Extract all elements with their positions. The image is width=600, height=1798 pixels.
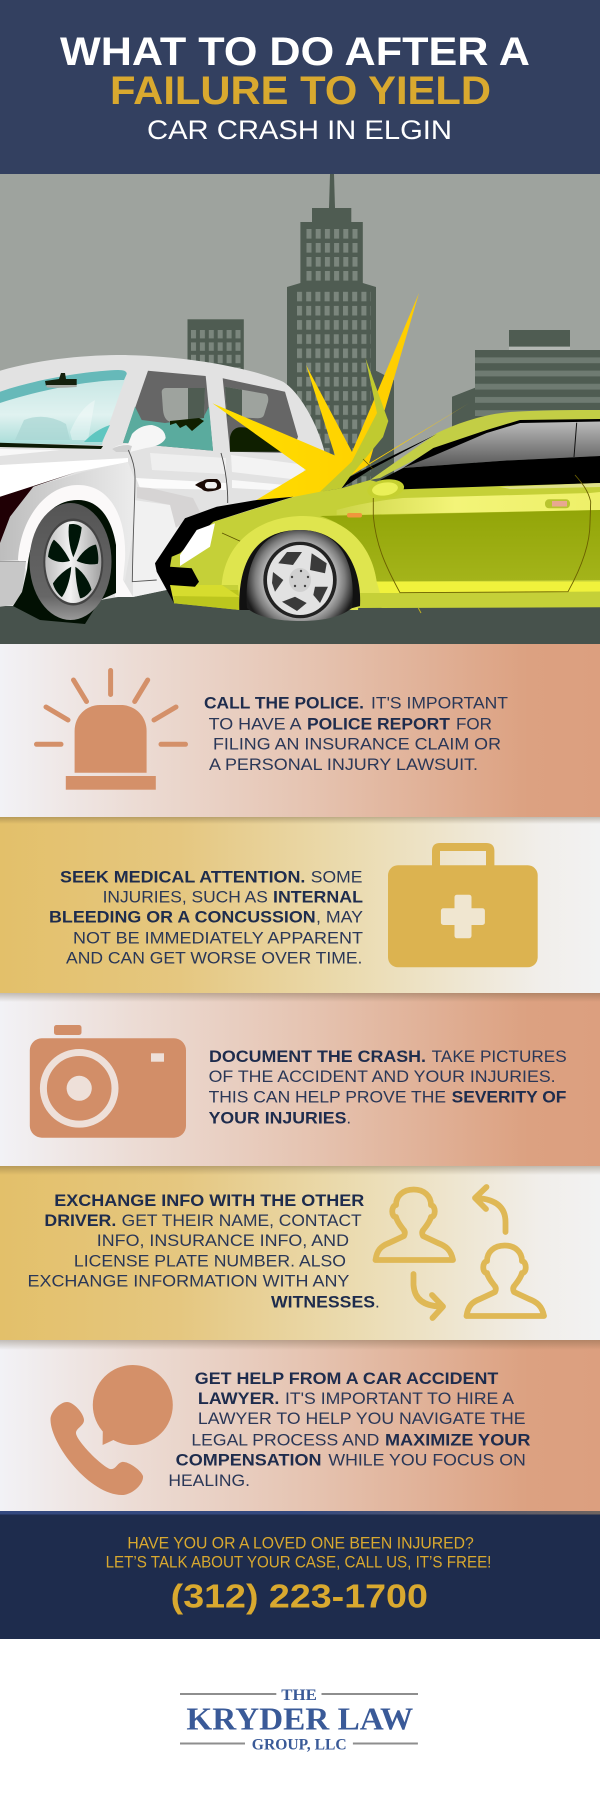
text: get legal help: LAWYER. [198, 1389, 279, 1408]
icon: first aid kit [388, 843, 538, 967]
icon: two people exchanging [376, 1187, 544, 1318]
car crash scene [0, 174, 600, 644]
text: document the crash: YOUR INJURIES [209, 1108, 346, 1127]
text: seek medical attention: AND CAN GET WORSE OVER TIME. [66, 948, 362, 967]
arrow down [414, 1274, 443, 1318]
call to action text: HAVE YOU OR A LOVED ONE BEEN INJURED? [127, 1534, 474, 1552]
text: seek medical attention: INJURIES, SUCH AS [103, 888, 268, 907]
icon: siren [36, 670, 186, 790]
text: get legal help: WHILE YOU FOCUS ON [328, 1450, 526, 1469]
door handle [545, 499, 570, 508]
panel: get legal help [0, 1340, 600, 1512]
text: call the police: TO HAVE A [209, 714, 302, 733]
bright shoulder strip [337, 492, 600, 515]
white headlight [180, 523, 215, 566]
hood highlight [0, 458, 128, 497]
lower sill [370, 582, 600, 593]
text: get legal help: HEALING. [168, 1471, 250, 1490]
text: seek medical attention: SOME [311, 867, 362, 886]
text: document the crash: DOCUMENT THE CRASH. [209, 1047, 426, 1066]
rear side window [223, 378, 298, 453]
text: get legal help: LEGAL PROCESS AND [191, 1430, 379, 1449]
white car [0, 355, 330, 624]
text: document the crash: . [346, 1108, 351, 1127]
door mirror [112, 425, 166, 452]
text: seek medical attention: NOT BE IMMEDIATELY APPARENT [73, 928, 363, 947]
text: get legal help: LAWYER TO HELP YOU NAVIGATE THE [198, 1409, 526, 1428]
text: document the crash: THIS CAN HELP PROVE THE [209, 1088, 446, 1107]
text: call the police: CALL THE POLICE. [204, 693, 364, 712]
front side window [123, 371, 213, 451]
rear view mirror [45, 373, 77, 386]
text: call the police: A PERSONAL INJURY LAWSUIT. [209, 755, 478, 774]
text: document the crash [209, 1047, 567, 1127]
logo [0, 1639, 600, 1798]
text: exchange info: EXCHANGE INFORMATION WITH ANY [28, 1272, 349, 1291]
text: get legal help: IT'S IMPORTANT TO HIRE A [285, 1389, 515, 1408]
text: call the police: POLICE REPORT [307, 714, 451, 733]
black bumper [155, 497, 293, 603]
title line 3: CAR CRASH IN ELGIN [147, 115, 452, 145]
text: call the police: FOR [456, 714, 492, 733]
windshield [0, 370, 127, 445]
text: exchange info: . [375, 1293, 380, 1312]
side marker [347, 513, 362, 518]
panel: call the police [0, 644, 600, 817]
text: exchange info: GET THEIR NAME, CONTACT [122, 1211, 362, 1230]
headlight [0, 472, 76, 543]
lower window black [380, 456, 600, 489]
text: exchange info: INFO, INSURANCE INFO, AND [97, 1231, 349, 1250]
window [403, 421, 600, 468]
phone number: (312) 223-1700 [171, 1577, 428, 1614]
wheel arch ring [18, 485, 133, 597]
door highlights [150, 453, 226, 474]
door lines and handle [128, 450, 157, 582]
text: get legal help: COMPENSATION [176, 1450, 322, 1469]
call to action text line 2: LET’S TALK ABOUT YOUR CASE, CALL US, IT’S FREE! [106, 1553, 491, 1571]
person one [376, 1190, 453, 1260]
title line 2: FAILURE TO YIELD [110, 69, 491, 113]
icon: phone and speech bubble [50, 1365, 173, 1495]
arrow up [475, 1187, 506, 1232]
impact starburst [212, 293, 469, 500]
panel: seek medical attention [0, 817, 600, 993]
fender [0, 462, 135, 596]
text: call the police: IT'S IMPORTANT [371, 693, 508, 712]
logo: firm name: KRYDER LAW [186, 1700, 413, 1736]
door lines [373, 475, 591, 593]
text: seek medical attention: BLEEDING OR A CONCUSSION [49, 908, 316, 927]
text: document the crash: TAKE PICTURES [432, 1047, 567, 1066]
front bumper [0, 562, 26, 607]
roof [370, 410, 600, 480]
door panel [320, 510, 600, 582]
call to action banner [0, 1511, 600, 1639]
panel: document the crash [0, 993, 600, 1166]
text: exchange info: DRIVER. [44, 1211, 116, 1230]
hood gap [342, 434, 437, 488]
panel: exchange info [0, 1166, 600, 1340]
road tick [418, 608, 421, 613]
front wheel [30, 503, 112, 620]
window frame [403, 419, 600, 468]
text: call the police [204, 693, 508, 774]
text: document the crash: SEVERITY OF [452, 1088, 566, 1107]
text: get legal help: GET HELP FROM A CAR ACCIDENT [195, 1369, 499, 1388]
body [170, 480, 600, 610]
wheel [239, 530, 360, 621]
top lamp [366, 477, 405, 501]
text: seek medical attention [49, 867, 363, 967]
text: exchange info: LICENSE PLATE NUMBER. ALSO [74, 1252, 346, 1271]
text: seek medical attention: INTERNAL [273, 888, 363, 907]
yellow car [155, 358, 600, 621]
text: exchange info [28, 1191, 380, 1312]
wheel arch ring [222, 516, 380, 610]
text: call the police: FILING AN INSURANCE CLAIM OR [213, 734, 501, 753]
wheel arch [13, 500, 116, 624]
text: get legal help [168, 1369, 530, 1490]
title line 1: WHAT TO DO AFTER A [60, 30, 530, 74]
crumpled hood [320, 358, 388, 492]
icon: camera [30, 1025, 186, 1138]
text: seek medical attention: , MAY [316, 908, 363, 927]
skyline buildings [188, 174, 600, 585]
text: seek medical attention: SEEK MEDICAL ATTENTION. [60, 867, 305, 886]
logo: the: THE [281, 1687, 317, 1704]
text: exchange info: EXCHANGE INFO WITH THE OTHER [54, 1191, 364, 1210]
text: get legal help: MAXIMIZE YOUR [385, 1430, 530, 1449]
text: document the crash: OF THE ACCIDENT AND YOUR INJURIES. [209, 1067, 556, 1086]
header banner [0, 0, 600, 174]
door pillar [574, 423, 577, 457]
text: exchange info: WITNESSES [271, 1293, 375, 1312]
logo: group llc: GROUP, LLC [252, 1736, 347, 1753]
person two [466, 1246, 544, 1316]
